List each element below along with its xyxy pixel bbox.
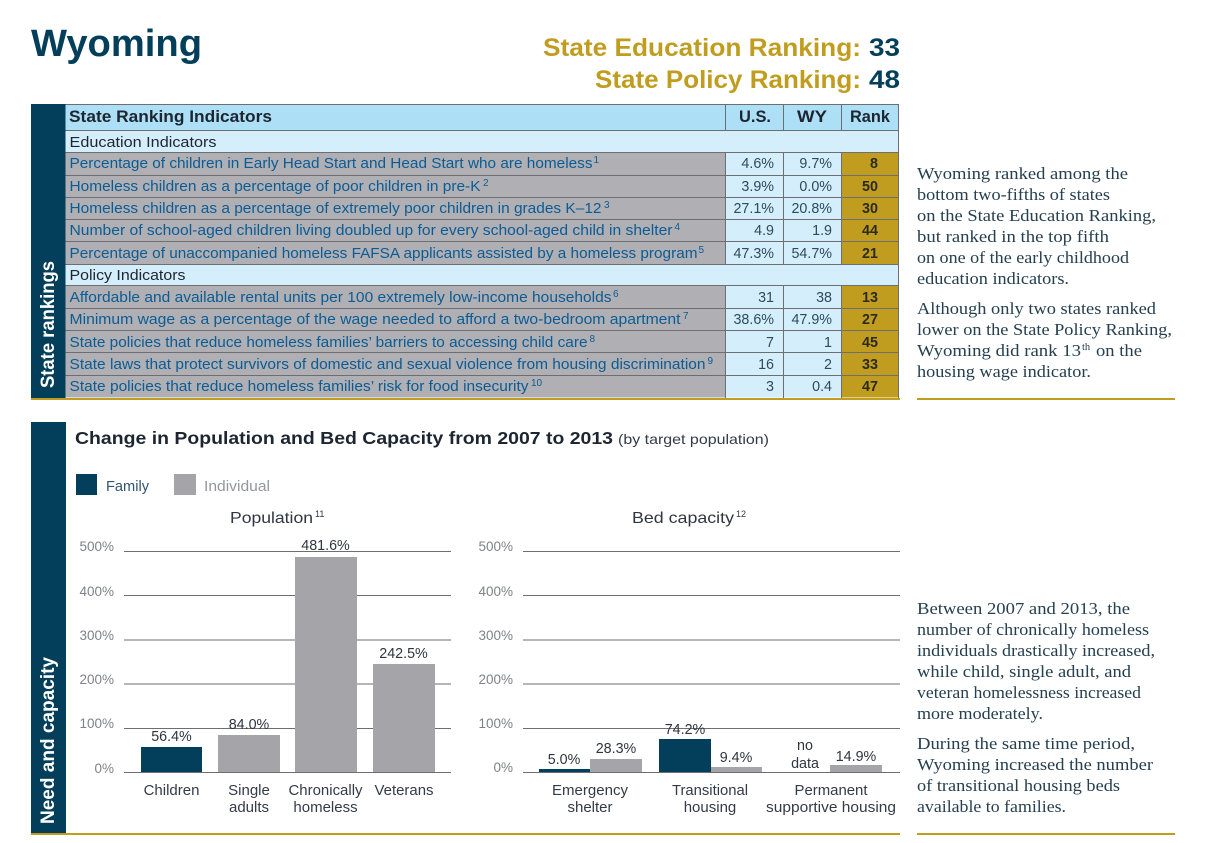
- y axis: population: 400%: [79, 584, 114, 599]
- row: K-12: 20.8%: [791, 201, 832, 217]
- category labels: population: adults: [229, 799, 269, 816]
- bar: chronically homeless: 481.6%: [301, 538, 350, 554]
- text block: need and capacity commentary: while child, single adult, and: [917, 662, 1132, 681]
- row: housing discrimination: [70, 356, 878, 373]
- row: early head start: 9.7%: [799, 156, 832, 172]
- row: child care: State policies that reduce homeless families’ barriers to accessing child care: [70, 335, 588, 351]
- row: FAFSA: 54.7%: [791, 246, 832, 262]
- bars: emergency shelter: 5.0%: [548, 752, 581, 768]
- sidebar: state rankings: [31, 104, 66, 399]
- text block: state rankings commentary: but ranked in the top fifth: [917, 227, 1110, 246]
- row: rental units: 38: [816, 290, 832, 306]
- chart title: population: Population: [230, 510, 313, 527]
- row: rental units: 6: [613, 289, 619, 300]
- bar: single adults: 84.0%: [229, 717, 270, 733]
- row: food insecurity: 10: [531, 378, 543, 389]
- y axis: population: 200%: [79, 672, 114, 687]
- table header: WY: [797, 108, 827, 126]
- sidebar: need and capacity: [31, 422, 66, 834]
- table header: [69, 108, 891, 126]
- row: K-12: [70, 200, 878, 217]
- bars: emergency shelter: 28.3%: [596, 741, 637, 757]
- row: FAFSA: [70, 245, 878, 262]
- category labels: population: Single: [228, 782, 270, 799]
- panel: state rankings: [31, 104, 900, 400]
- y axis: population: 0%: [94, 761, 114, 776]
- state rankings summary: 33: [869, 34, 900, 62]
- bar chart: population: [79, 509, 451, 816]
- row: early head start: Percentage of children in Early Head Start and Head Start who are homeless: [70, 156, 592, 172]
- chart title: population: 11: [315, 509, 324, 519]
- category labels: population: Chronically: [288, 782, 363, 799]
- legend: [76, 474, 270, 495]
- bar: children: [141, 729, 202, 772]
- row: housing discrimination: 2: [824, 357, 832, 373]
- row: food insecurity: 47: [862, 379, 878, 395]
- chart title: bed capacity: 12: [736, 509, 746, 519]
- row: doubled up: 44: [862, 223, 878, 239]
- row: housing discrimination: 16: [758, 357, 774, 373]
- bars: emergency shelter: [539, 741, 642, 772]
- row: rental units: [70, 289, 878, 306]
- category labels: bed capacity: Emergency: [552, 782, 628, 799]
- text block: state rankings commentary: Wyoming did rank 13: [917, 341, 1081, 360]
- row: early head start: 8: [870, 156, 878, 172]
- category labels: bed capacity: shelter: [567, 799, 613, 816]
- category labels: bed capacity: Transitional: [672, 782, 748, 799]
- row: child care: 1: [824, 335, 832, 351]
- text block: state rankings commentary: th: [1082, 342, 1091, 353]
- row: minimum wage: 38.6%: [733, 312, 774, 328]
- y axis: bed capacity: 0%: [493, 760, 513, 775]
- text block: need and capacity commentary: Wyoming increased the number: [917, 755, 1154, 774]
- bar: veterans: [373, 646, 435, 772]
- row: rental units: 13: [862, 290, 878, 306]
- row: pre-K: 2: [483, 178, 489, 189]
- y axis: bed capacity: 400%: [478, 584, 513, 599]
- text block: need and capacity commentary: veteran homelessness increased: [917, 683, 1142, 702]
- row: FAFSA: 47.3%: [733, 246, 774, 262]
- section heading: education indicators: Education Indicators: [70, 135, 216, 151]
- row: child care: 45: [862, 335, 878, 351]
- row: housing discrimination: 33: [862, 357, 878, 373]
- row: food insecurity: 3: [766, 379, 774, 395]
- row: pre-K: 3.9%: [741, 179, 774, 195]
- chart title: bed capacity: Bed capacity: [632, 510, 734, 527]
- row: doubled up: 1.9: [812, 223, 832, 239]
- row: child care: 8: [590, 334, 596, 345]
- bars: transitional housing: [659, 722, 762, 772]
- text block: need and capacity commentary: more moderately.: [917, 704, 1043, 723]
- row: child care: 7: [766, 335, 774, 351]
- text block: need and capacity commentary: Between 2007 and 2013, the: [917, 599, 1130, 618]
- row: housing discrimination: 9: [708, 356, 714, 367]
- row: doubled up: Number of school-aged children living doubled up for every school-aged child in shelter: [70, 223, 673, 239]
- text block: state rankings commentary: on one of the early childhood: [917, 248, 1130, 267]
- row: minimum wage: Minimum wage as a percentage of the wage needed to afford a two-bedroom apartment: [70, 312, 680, 328]
- row: K-12: 3: [604, 200, 610, 211]
- text block: need and capacity commentary: individuals drastically increased,: [917, 641, 1155, 660]
- text block: state rankings commentary: education indicators.: [917, 269, 1069, 288]
- state rankings summary: State Education Ranking:: [543, 34, 861, 62]
- text block: state rankings commentary: bottom two-fifths of states: [917, 185, 1110, 204]
- bars: permanent supportive housing: no: [797, 738, 813, 754]
- chart heading: Change in Population and Bed Capacity from 2007 to 2013: [75, 428, 613, 448]
- bars: permanent supportive housing: data: [791, 756, 819, 772]
- row: pre-K: 0.0%: [799, 179, 832, 195]
- row: FAFSA: Percentage of unaccompanied homeless FAFSA applicants assisted by a homeless program: [70, 246, 697, 262]
- state rankings summary: 48: [869, 66, 900, 94]
- row: minimum wage: [70, 311, 878, 328]
- category labels: population: homeless: [293, 799, 358, 816]
- row: doubled up: [70, 222, 878, 239]
- y axis: bed capacity: 500%: [478, 539, 513, 554]
- bars: permanent supportive housing: 14.9%: [836, 749, 877, 765]
- bar: chronically homeless: [295, 538, 357, 772]
- panel: need and capacity: [31, 422, 900, 835]
- row: housing discrimination: State laws that protect survivors of domestic and sexual violence from housing discrimination: [70, 357, 706, 373]
- bars: permanent supportive housing: [791, 738, 882, 772]
- y axis: bed capacity: 300%: [478, 628, 513, 643]
- category labels: population: Children: [144, 782, 199, 799]
- legend: Family: [106, 479, 150, 495]
- row: food insecurity: [70, 378, 878, 395]
- bars: transitional housing: 9.4%: [720, 750, 753, 766]
- bar: single adults: [218, 717, 280, 772]
- row: child care: [70, 334, 878, 351]
- row: doubled up: 4: [674, 222, 680, 233]
- sidebar: state rankings: State rankings: [38, 261, 59, 388]
- row: rental units: Affordable and available rental units per 100 extremely low-income households: [70, 290, 612, 306]
- category labels: population: [144, 782, 434, 816]
- state rankings summary: [543, 34, 900, 94]
- row: FAFSA: 21: [862, 246, 878, 262]
- text block: need and capacity commentary: number of chronically homeless: [917, 620, 1149, 639]
- row: minimum wage: 47.9%: [791, 312, 832, 328]
- table backgrounds: [31, 104, 900, 400]
- text block: state rankings commentary: [917, 164, 1172, 381]
- bar: veterans: 242.5%: [379, 646, 428, 662]
- row: doubled up: 4.9: [754, 223, 774, 239]
- legend: Individual: [204, 479, 270, 495]
- row: pre-K: Homeless children as a percentage of poor children in pre-K: [70, 179, 481, 195]
- title: Wyoming: [31, 23, 202, 65]
- text block: need and capacity commentary: of transitional housing beds: [917, 776, 1120, 795]
- row: K-12: Homeless children as a percentage of extremely poor children in grades K–12: [70, 201, 602, 217]
- row: pre-K: [70, 178, 878, 195]
- row: food insecurity: State policies that reduce homeless families’ risk for food insecurity: [70, 379, 529, 395]
- bar: children: 56.4%: [151, 729, 192, 745]
- table header: State Ranking Indicators: [69, 108, 272, 126]
- text block: state rankings commentary: on the State Education Ranking,: [917, 206, 1156, 225]
- row: minimum wage: 27: [862, 312, 878, 328]
- text block: state rankings commentary: lower on the State Policy Ranking,: [917, 320, 1172, 339]
- text block: state rankings commentary: housing wage indicator.: [917, 362, 1091, 381]
- y axis: population: 300%: [79, 628, 114, 643]
- y axis: population: 500%: [79, 539, 114, 554]
- sidebar: need and capacity: Need and capacity: [38, 657, 59, 824]
- y axis: population: [79, 539, 114, 776]
- text block: state rankings commentary: on the: [1096, 341, 1142, 360]
- text block: need and capacity commentary: available to families.: [917, 797, 1066, 816]
- row: early head start: [70, 155, 878, 172]
- row: rental units: 31: [758, 290, 774, 306]
- chart heading: [75, 428, 769, 448]
- state rankings summary: State Policy Ranking:: [595, 66, 861, 94]
- y axis: population: 100%: [79, 716, 114, 731]
- row: pre-K: 50: [862, 179, 878, 195]
- row: FAFSA: 5: [698, 245, 704, 256]
- row: K-12: 27.1%: [733, 201, 774, 217]
- row: K-12: 30: [862, 201, 878, 217]
- bar chart: bed capacity: [478, 509, 900, 816]
- text block: need and capacity commentary: During the same time period,: [917, 734, 1135, 753]
- text block: state rankings commentary: Although only two states ranked: [917, 299, 1157, 318]
- table header: Rank: [850, 108, 891, 126]
- row: early head start: 4.6%: [741, 156, 774, 172]
- category labels: bed capacity: Permanent: [794, 782, 868, 799]
- text block: state rankings commentary: Wyoming ranked among the: [917, 164, 1128, 183]
- row: minimum wage: 7: [683, 311, 689, 322]
- row: early head start: 1: [594, 155, 600, 166]
- table header: U.S.: [739, 108, 771, 126]
- category labels: population: Veterans: [374, 782, 434, 799]
- section heading: policy indicators: Policy Indicators: [70, 268, 186, 284]
- y axis: bed capacity: [478, 539, 513, 775]
- category labels: bed capacity: supportive housing: [766, 799, 896, 816]
- y axis: bed capacity: 100%: [478, 716, 513, 731]
- bars: transitional housing: 74.2%: [665, 722, 706, 738]
- category labels: bed capacity: [552, 782, 896, 816]
- row: food insecurity: 0.4: [812, 379, 832, 395]
- y axis: bed capacity: 200%: [478, 672, 513, 687]
- text block: need and capacity commentary: [917, 599, 1155, 816]
- category labels: bed capacity: housing: [684, 799, 736, 816]
- chart heading: (by target population): [618, 431, 769, 447]
